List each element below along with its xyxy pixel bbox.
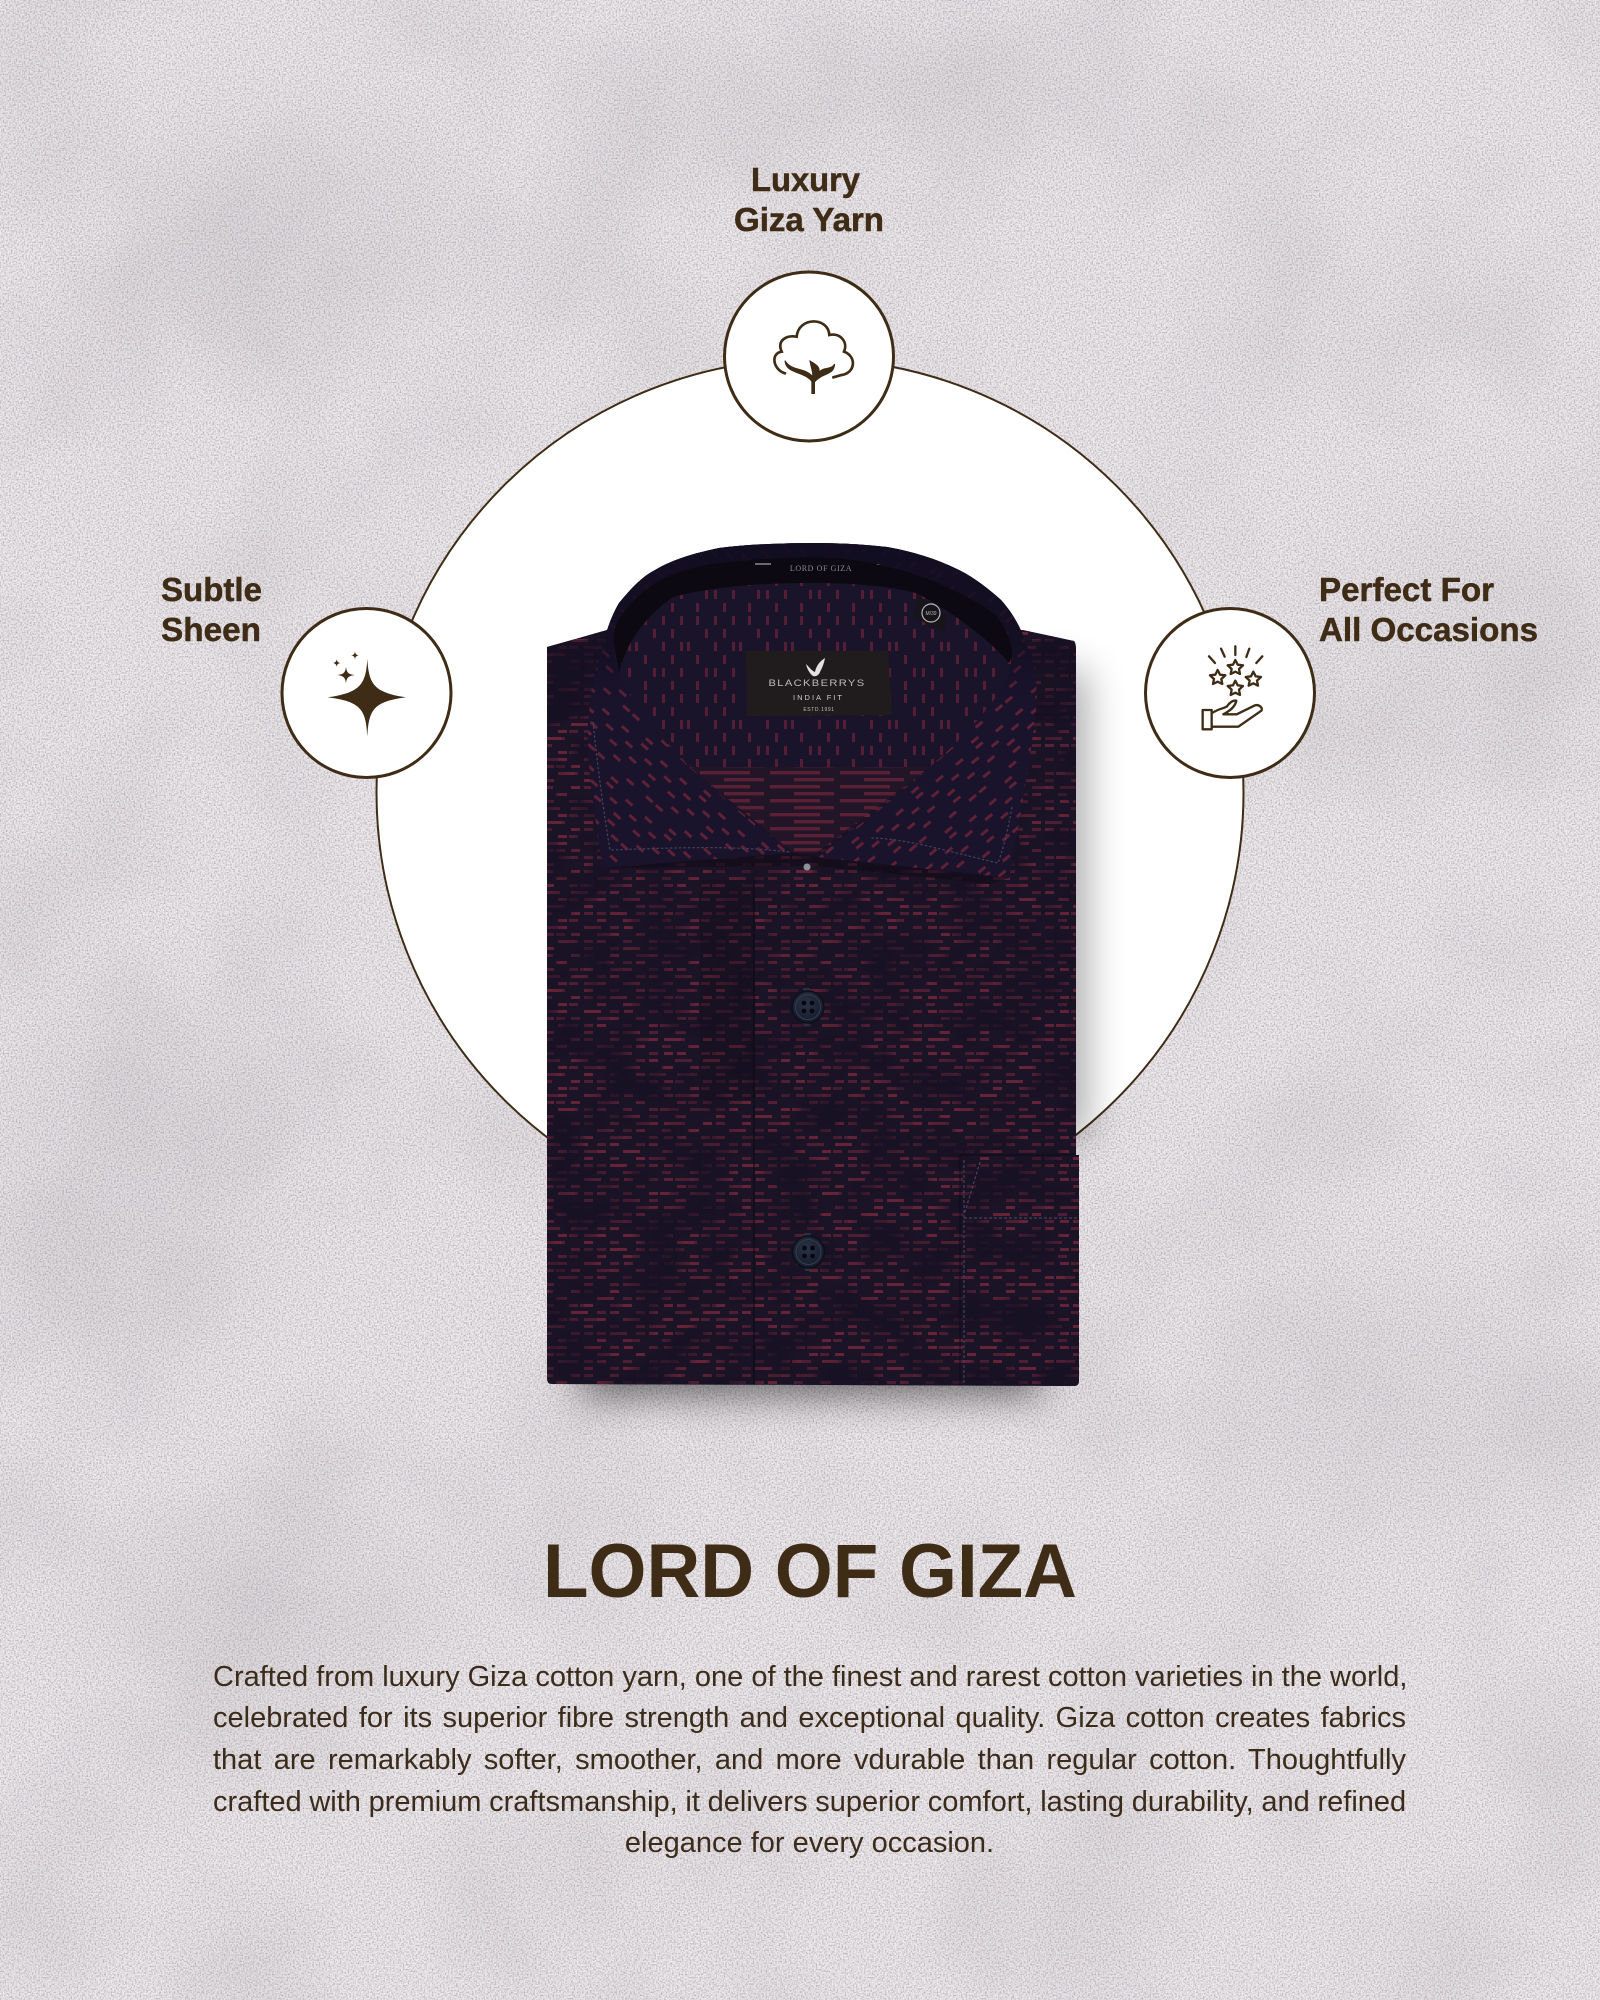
shirt body bbox=[540, 625, 1085, 1395]
collar stitched text: LORD OF GIZA bbox=[790, 564, 852, 573]
shirt shadow bbox=[580, 670, 1085, 1395]
body text: elegance for every occasion. bbox=[625, 1827, 994, 1859]
label: perfect for all occasions: Perfect For bbox=[1319, 571, 1494, 608]
badge: perfect for all occasions bbox=[1146, 608, 1314, 778]
collar backing bbox=[588, 543, 1037, 868]
shirt button 1 bbox=[792, 988, 824, 1026]
body text: crafted with premium craftsmanship, it delivers superior comfort, lasting durability, and refined bbox=[213, 1786, 1406, 1818]
icon: hand with stars bbox=[1203, 646, 1262, 729]
neck interior bbox=[614, 583, 1012, 853]
large white circle behind shirt bbox=[376, 359, 1244, 1226]
brand label: ESTD.1991 bbox=[803, 707, 835, 713]
body text: celebrated for its superior fibre strength and exceptional quality. Giza cotton creates fabrics bbox=[213, 1702, 1406, 1734]
brand label: INDIA FIT bbox=[793, 693, 844, 702]
label: luxury giza yarn: Giza Yarn bbox=[734, 201, 884, 238]
title: LORD OF GIZA bbox=[543, 1529, 1077, 1614]
icon: sparkles bbox=[328, 651, 406, 737]
placket seam bbox=[753, 880, 755, 1386]
icon: cotton boll bbox=[774, 321, 853, 394]
folded shirt bbox=[540, 543, 1085, 1395]
label: subtle sheen: Subtle bbox=[161, 571, 262, 608]
brand label bbox=[746, 651, 892, 716]
size tag bbox=[913, 595, 947, 632]
badge: luxury giza yarn bbox=[724, 272, 894, 441]
label: perfect for all occasions: All Occasions bbox=[1319, 611, 1538, 648]
inner collar band bbox=[612, 554, 1014, 673]
brand label: BLACKBERRYS bbox=[768, 678, 866, 688]
shirt button 2 bbox=[792, 1233, 824, 1271]
badge: subtle sheen bbox=[282, 608, 451, 778]
top collar button bbox=[603, 853, 1009, 884]
collar stitched text bbox=[755, 564, 892, 573]
label: subtle sheen bbox=[161, 571, 262, 648]
label: luxury giza yarn bbox=[734, 161, 884, 238]
collar stitching bbox=[593, 722, 1012, 863]
body text bbox=[213, 1660, 1407, 1859]
label: luxury giza yarn: Luxury bbox=[751, 161, 861, 198]
chest pocket bbox=[960, 1155, 1079, 1386]
collar wings bbox=[588, 543, 1037, 878]
label: subtle sheen: Sheen bbox=[161, 611, 261, 648]
body text: that are remarkably softer, smoother, and more vdurable than regular cotton. Thoughtfully bbox=[213, 1744, 1406, 1776]
label: perfect for all occasions bbox=[1319, 571, 1538, 648]
size tag: M/39 bbox=[925, 611, 937, 617]
body text: Crafted from luxury Giza cotton yarn, one of the finest and rarest cotton varieties in the world, bbox=[213, 1660, 1407, 1692]
